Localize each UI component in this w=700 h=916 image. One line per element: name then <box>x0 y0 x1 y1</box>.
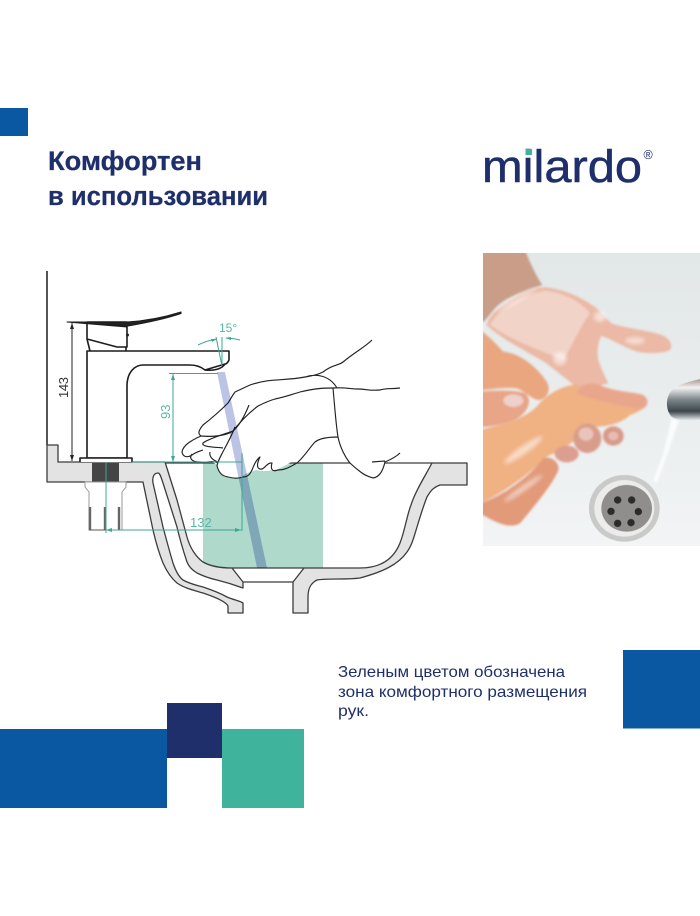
tap <box>667 378 700 421</box>
threaded connector <box>85 463 126 530</box>
title: Комфортен <box>48 146 202 176</box>
dimension 15 degrees <box>198 321 240 366</box>
tap water <box>654 419 678 482</box>
drain <box>589 475 660 542</box>
upper arm line <box>305 340 372 388</box>
handle knob <box>126 334 129 336</box>
diagram: faucet and sink <box>47 271 467 613</box>
decorative blocks bottom left <box>0 703 304 808</box>
dimension 132 <box>106 453 242 533</box>
back forearm <box>480 250 542 322</box>
wavy sleeve line <box>333 388 400 390</box>
glove top line <box>199 377 305 436</box>
neck <box>87 339 126 351</box>
photo background <box>483 253 700 546</box>
wall line <box>46 271 48 445</box>
fingernail <box>503 394 523 407</box>
fingers <box>182 431 233 463</box>
photo: washing hands under a tap <box>480 250 700 546</box>
dimension 15 degrees: 15° <box>219 321 237 335</box>
infographic canvas <box>0 108 700 808</box>
fingertips <box>573 424 601 453</box>
pale foam on palm <box>490 291 590 360</box>
front forearm <box>480 385 648 503</box>
logo: milardo: milardo <box>482 141 642 192</box>
glove lower edge <box>217 427 338 478</box>
caption text: зона комфортного размещения <box>338 684 587 701</box>
caption text: рук. <box>338 703 369 720</box>
caption text <box>338 664 587 720</box>
skin and water <box>480 250 679 526</box>
hands line drawing <box>182 340 400 478</box>
decorative square top left <box>0 108 28 136</box>
sink right wall section <box>293 463 467 613</box>
hand fill outline <box>182 376 400 478</box>
faucet body and spout <box>87 351 229 458</box>
dimension 132: 132 <box>190 515 212 530</box>
glove middle line <box>233 388 333 431</box>
middle finger <box>577 383 647 409</box>
lever <box>67 312 181 327</box>
countertop and left sink wall section <box>47 445 243 613</box>
dimension 93: 93 <box>158 405 173 419</box>
dimension 143 <box>56 323 74 461</box>
sink rim and drain lines <box>165 463 432 582</box>
comfort zone green area <box>203 463 323 568</box>
thumb and back hand <box>480 330 549 400</box>
faucet <box>67 312 229 462</box>
open palm <box>487 287 671 390</box>
caption text: Зеленым цветом обозначена <box>338 664 565 681</box>
cuff <box>333 388 400 478</box>
title: в использовании <box>48 181 268 211</box>
base plate <box>80 458 132 462</box>
water stream <box>217 372 267 568</box>
dimension 93 <box>158 374 218 462</box>
aerator <box>205 364 225 370</box>
lower finger <box>480 391 529 427</box>
lower supporting hand <box>480 458 559 526</box>
handle <box>87 322 127 347</box>
title <box>48 146 268 211</box>
decorative square right <box>623 650 700 728</box>
logo: milardo: ® <box>644 148 654 162</box>
foam highlights <box>495 286 645 504</box>
dimension 143: 143 <box>56 377 71 398</box>
